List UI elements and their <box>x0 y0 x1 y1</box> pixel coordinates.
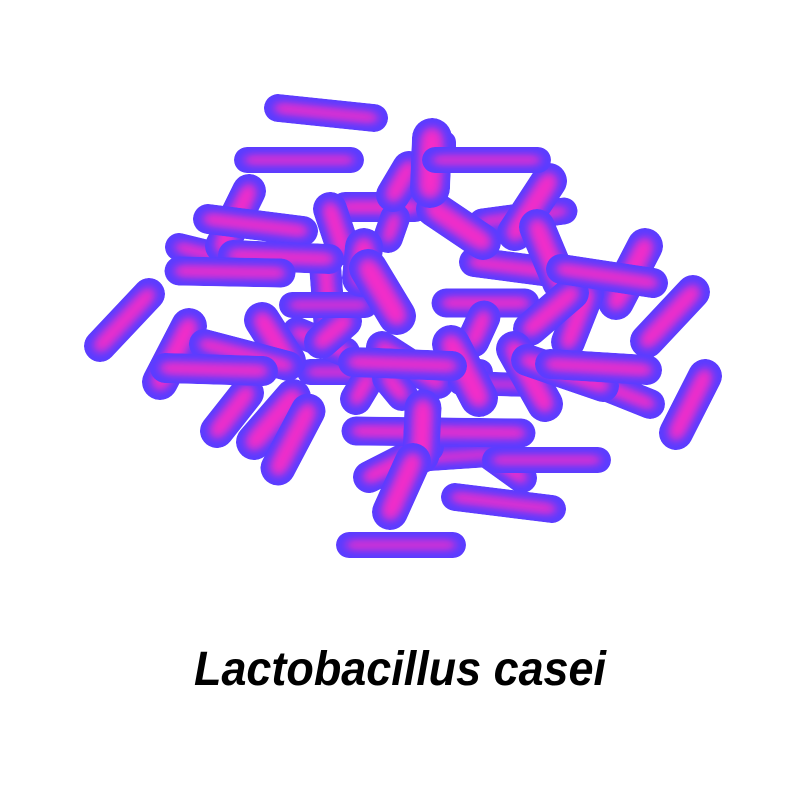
rod: back centre right <box>474 262 550 272</box>
rod: behind mid left <box>297 332 345 352</box>
rod: right upper diagonal <box>616 246 645 302</box>
rod: lower centre short right <box>388 378 402 395</box>
rod: horizontal centre left <box>292 292 365 318</box>
rod: upper left slanted <box>208 219 303 231</box>
rod: bottom horizontal wide <box>356 431 521 433</box>
rod: horizontal mid left <box>165 368 263 371</box>
rod: vertical top centre <box>430 138 432 188</box>
rod: far right lower diagonal <box>676 376 705 433</box>
rod: diagonal top right of gap <box>434 209 483 242</box>
rod: diagonal upper left <box>222 191 249 246</box>
rod: bottom isolated <box>349 532 453 558</box>
rod: back centre horizontal <box>310 359 480 385</box>
rod: bottom back diagonal <box>369 447 428 477</box>
rod: right lower steep <box>514 349 545 404</box>
rod: left mid diagonal <box>160 326 189 382</box>
rod: horizontal far right <box>561 269 653 283</box>
rod: bottom slanted <box>455 497 552 509</box>
rod: bottom diagonal front <box>390 461 413 512</box>
rod: horizontal centre right <box>446 288 525 318</box>
rod: lower left two <box>254 397 293 442</box>
rod: diagonal upper right <box>515 181 549 233</box>
rod: bottom right horizontal <box>495 447 598 473</box>
rod: vertical mid left <box>325 265 330 330</box>
rod: behind centre <box>382 347 438 383</box>
rod: upper left horizontal three <box>179 271 281 273</box>
rod: top isolated <box>278 108 374 118</box>
rod: connecting right of centre <box>460 383 530 385</box>
rod: horizontal centre <box>353 362 452 366</box>
bacteria cluster <box>100 108 705 545</box>
rod: diagonal centre <box>368 268 397 316</box>
rod: bottom vertical <box>421 408 423 455</box>
title: Lactobacillus casei <box>194 643 608 696</box>
rod: back upper left <box>179 247 240 262</box>
rod: steep right <box>537 227 560 282</box>
rod: slanted mid left <box>204 344 288 366</box>
rod: far left isolated <box>100 294 149 346</box>
rod: far right diagonal <box>647 292 693 341</box>
rod: lower left three <box>278 411 308 468</box>
rod: back right horizontal <box>482 211 564 222</box>
rod: second top isolated <box>247 147 351 173</box>
rod: short behind top centre <box>388 218 395 238</box>
rod: back horizontal top centre <box>345 192 415 222</box>
rod: mid centre <box>321 321 345 342</box>
rod: upper left horizontal two <box>233 255 329 259</box>
rod: bottom back horizontal <box>400 454 490 460</box>
rod: right lower slanted <box>527 360 603 386</box>
rod: right lower horizontal <box>550 364 647 370</box>
rod: diagonal right centre <box>530 293 572 329</box>
rod: behind right centre <box>568 294 587 342</box>
rod: lower left one <box>217 393 247 431</box>
rod: steep mid left <box>262 320 288 361</box>
rod: lower centre short <box>356 379 368 399</box>
rod: thick centre top <box>361 247 364 278</box>
rod: short centre <box>473 317 484 341</box>
rod: small top stub <box>434 142 456 150</box>
rod: steep centre <box>451 344 479 398</box>
rod: horizontal top right <box>435 147 538 173</box>
rod: right lower back <box>590 380 650 404</box>
rod: steep top centre left <box>330 209 343 248</box>
rod: top centre left diagonal <box>393 168 409 195</box>
rod: bottom back right <box>472 442 522 478</box>
